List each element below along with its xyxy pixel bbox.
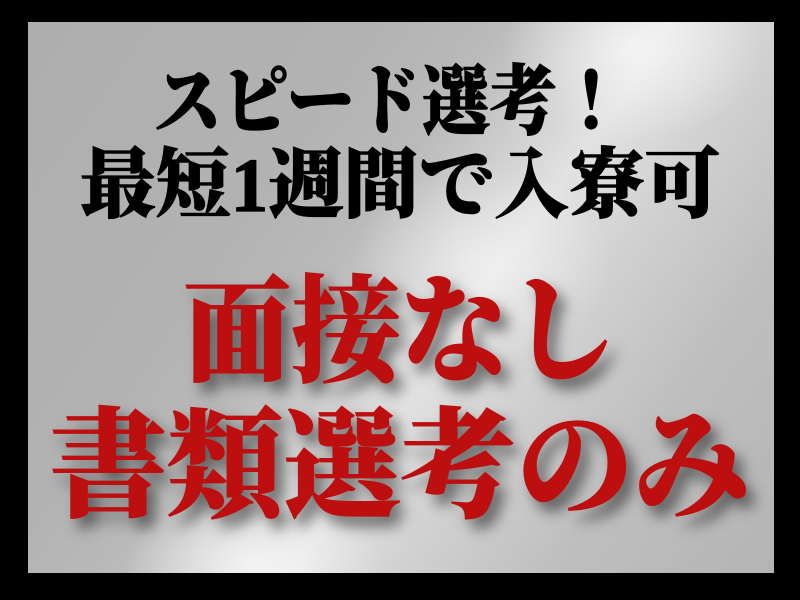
red heading line 3: 面接なし — [183, 270, 617, 398]
red heading line 4: 書類選考のみ — [50, 401, 750, 533]
black heading line 2: 最短1週間で入寮可 — [80, 144, 720, 228]
black heading line 1: スピード選考！ — [154, 61, 625, 145]
